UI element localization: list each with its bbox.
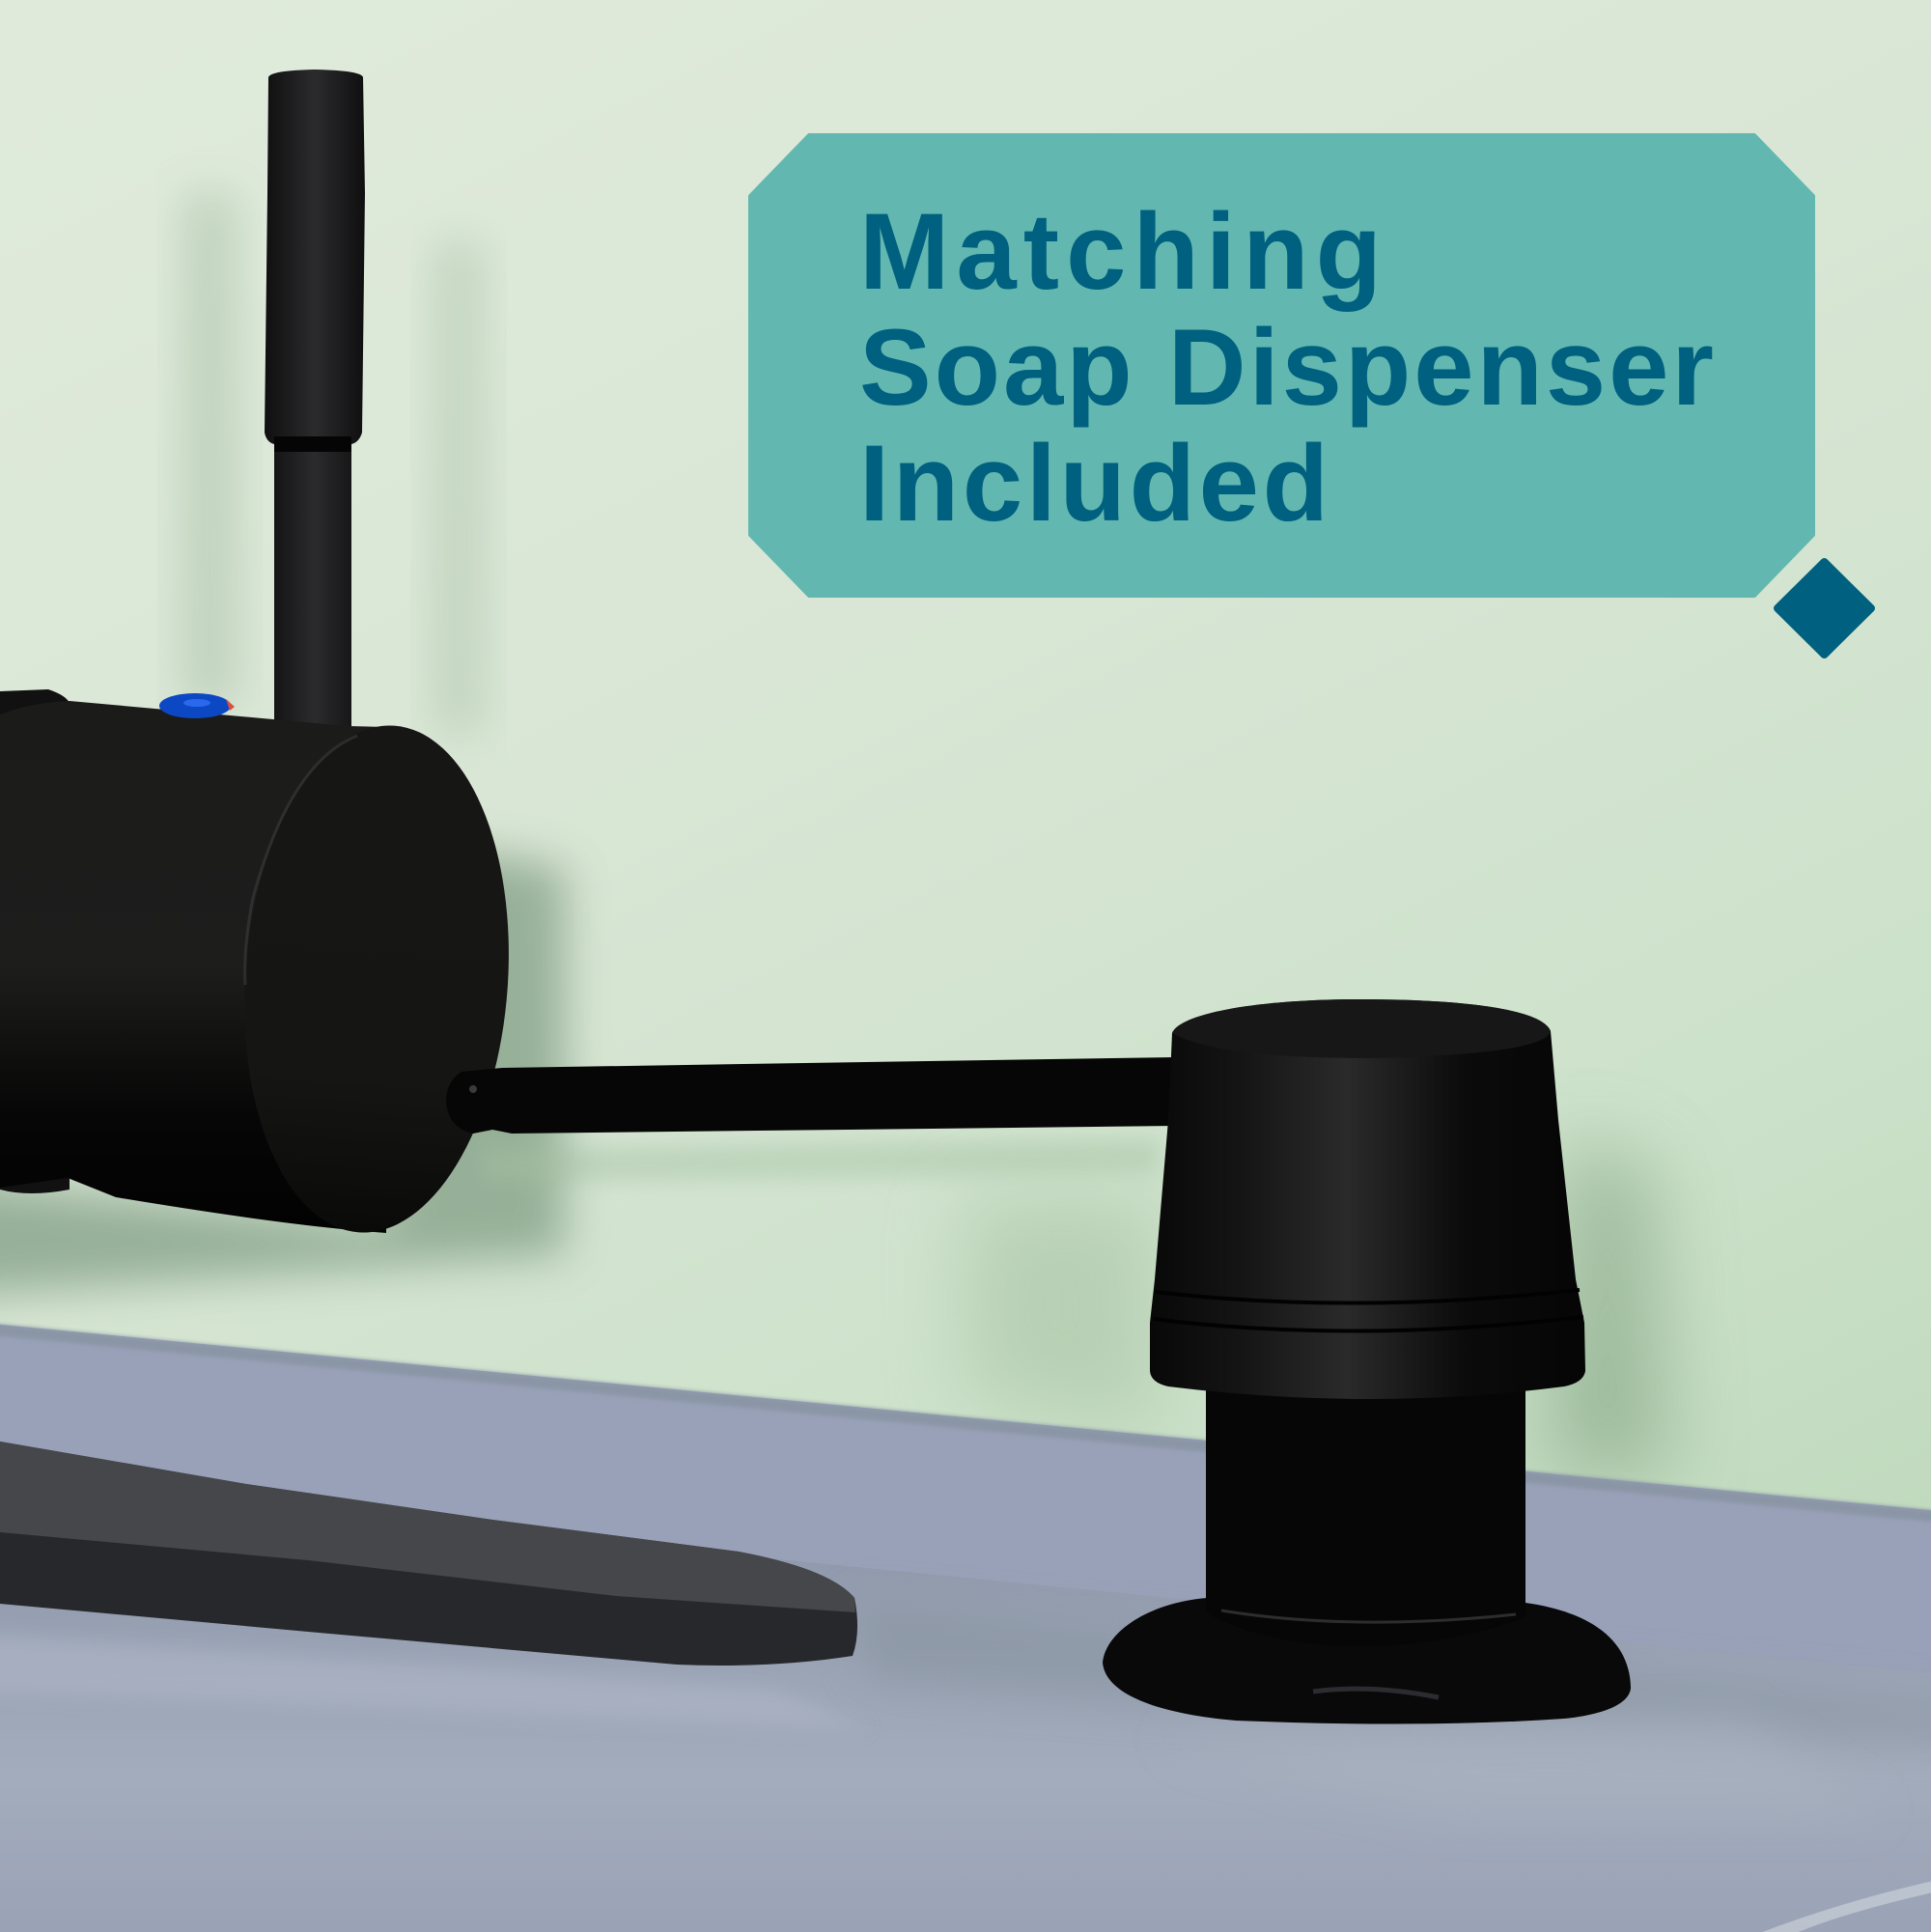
faucet end cap [228,716,525,1242]
head [1155,999,1576,1296]
faucet body [0,689,525,1242]
collar [1150,1279,1585,1399]
counter ledge [0,1321,1931,1932]
soap dispenser pump rod [446,1057,1176,1134]
head top face [1172,999,1551,1058]
wall shadows [0,193,1670,1477]
callout panel [750,135,1813,596]
sink surface [0,1479,1931,1932]
faucet handle lever [265,70,365,734]
callout text: Soap Dispenser [859,307,1714,428]
base flange [1103,1598,1631,1724]
faucet base plate [0,1442,857,1666]
soap dispenser [1103,999,1631,1724]
neck [1206,1381,1525,1646]
callout text: Included [859,423,1329,544]
callout text: Matching [859,191,1382,312]
blue cold-water indicator [159,693,235,718]
diamond accent [1777,562,1871,655]
